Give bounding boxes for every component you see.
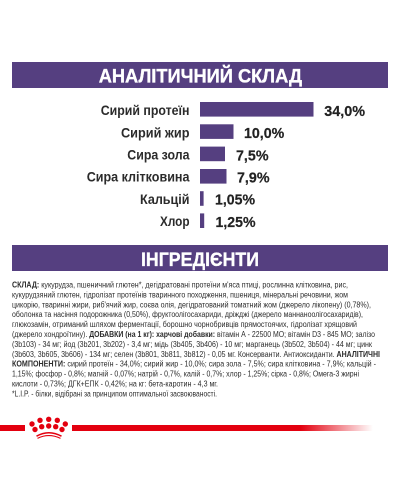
text block: ingredients list: (3b603, 3b605, 3b606) - 134 мг; селен (3b801, 3b811, 3b812) - 0,05 мг. Консерванти. Антиоксиданти. АНАЛІТИЧНІ <box>12 350 380 359</box>
row: crude ash <box>127 147 269 164</box>
row: crude ash: Сира зола <box>127 147 190 162</box>
text block: ingredients list: глюкозамін, отриманий шляхом ферментації, борошно чорнобривців прямостоячих, гідролізат хрящовий <box>12 320 357 329</box>
heading: analytical composition <box>12 62 388 88</box>
row: crude fibre: Сира клітковина <box>87 170 190 185</box>
row: chlorine <box>160 213 256 231</box>
text block: ingredients list: оболонка та насіння подорожника (0,50%), фруктоолігосахариди, дріжджі (джерело маннаноолігосахаридів), <box>12 310 363 319</box>
row: crude fat: 10,0% <box>244 126 284 142</box>
row: chlorine: Хлор <box>160 214 190 229</box>
footer bar: red line left <box>0 425 25 431</box>
row: crude fat <box>121 124 284 142</box>
row: crude fibre <box>87 169 270 187</box>
row: crude protein <box>101 102 365 120</box>
text block: ingredients list: (джерело хондроїтину). ДОБАВКИ (на 1 кг): харчові добавки: вітамін А - 22500 МО; вітамін D3 - 845 МО; залізо <box>12 330 376 339</box>
row: crude protein: Сирий протеїн <box>101 103 190 118</box>
bar chart: analytical composition <box>87 102 365 231</box>
row: crude ash: 7,5% <box>236 148 269 164</box>
heading: ingredients: ІНГРЕДІЄНТИ <box>141 249 259 271</box>
row: crude protein: 34,0% <box>324 104 365 120</box>
text block: ingredients list: кукурудзяний глютен, гідролізат протеїнів тваринного походження, пшениця, мінеральні речовини, жом <box>12 290 348 299</box>
text block: ingredients list <box>12 280 380 398</box>
row: calcium: Кальцій <box>140 192 190 207</box>
heading: analytical composition: АНАЛІТИЧНИЙ СКЛАД <box>99 64 302 88</box>
text block: ingredients list: СКЛАД: кукурудза, пшеничний глютен*, дегідратовані протеїни м'яса птиці, рослинна клітковина, рис, <box>12 280 348 290</box>
text block: ingredients list: кислоти - 0,73%; ДГК+ЕПК - 0,42%; на кг: бета-каротин - 4,3 мг. <box>12 380 218 388</box>
row: crude fibre: 7,9% <box>237 171 270 187</box>
row: chlorine: 1,25% <box>216 215 256 231</box>
row: crude fat: Сирий жир <box>121 125 190 140</box>
row: calcium: 1,05% <box>215 193 255 209</box>
icon: Royal Canin crown <box>29 417 68 438</box>
heading: ingredients <box>12 245 388 271</box>
text block: ingredients list: цикорію, тваринні жири, риб'ячий жир, соєва олія, дегідратований томатний жом (джерело лікопену) (0,78%), <box>12 300 371 309</box>
text block: ingredients list: *L.I.P. - білки, відібрані за принципом оптимальної засвоюваності. <box>12 389 217 398</box>
text block: ingredients list: (3b103) - 34 мг; йод (3b201, 3b202) - 3,4 мг; мідь (3b405, 3b406) - 10 мг; марганець (3b502, 3b504) - 44 мг; цинк <box>12 340 373 349</box>
footer bar: red line right with fade <box>72 425 373 431</box>
text block: ingredients list: КОМПОНЕНТИ: сирий протеїн - 34,0%; сирий жир - 10,0%; сира зола - 7,5%; сира клітковина - 7,9%; кальцій - <box>12 360 376 369</box>
text block: ingredients list: 1,15%; фосфор - 0,8%; магній - 0,07%; натрій - 0,7%, калій - 0,7%; хлор - 1,25%; сірка - 0,8%; Омега-3 жирні <box>12 370 359 379</box>
row: calcium <box>140 191 255 209</box>
